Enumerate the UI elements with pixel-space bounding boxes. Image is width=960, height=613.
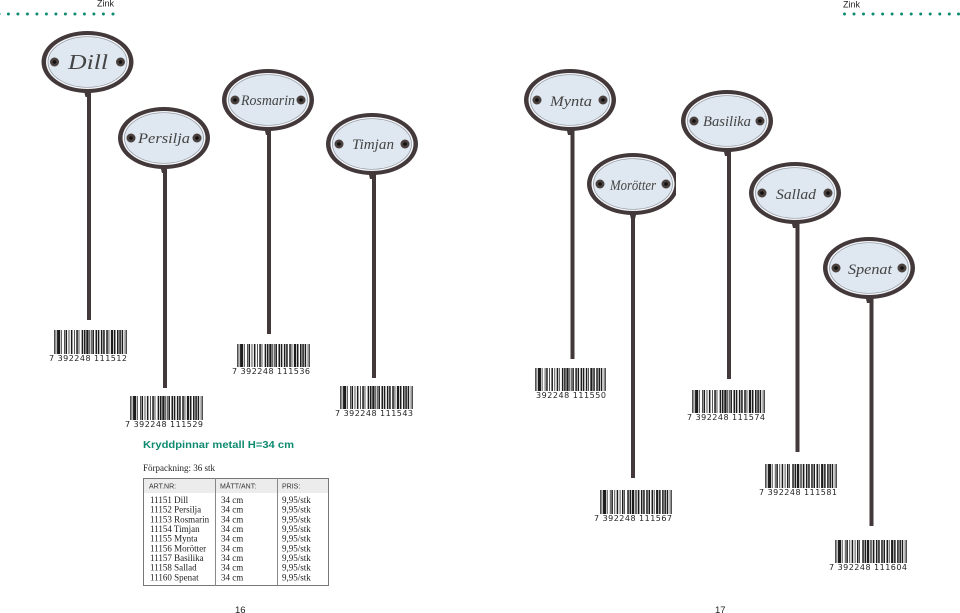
barcode 111536 (232, 344, 310, 376)
table column: article: 11157 Basilika (150, 553, 204, 563)
table column: article (150, 495, 210, 582)
barcode 111574 (687, 390, 765, 422)
barcode 111581 (759, 464, 837, 497)
plant marker: Persilja: Persilja (137, 131, 190, 147)
table column: size: 34 cm (221, 495, 243, 505)
product title: Kryddpinnar metall H=34 cm (143, 439, 294, 451)
table column: size: 34 cm (221, 572, 243, 582)
table column: size: 34 cm (221, 514, 243, 524)
table column: price: 9,95/stk (282, 534, 311, 544)
table column: price: 9,95/stk (282, 495, 311, 505)
table column: size (221, 495, 243, 582)
barcode 111604: 7 392248 111604 (829, 563, 907, 572)
barcode 111550: 392248 111550 (536, 391, 606, 400)
table header row: MÅTT/ANT: (220, 482, 256, 490)
plant marker: Dill: Dill (67, 50, 108, 74)
plant marker: Rosmarin: Rosmarin (240, 93, 295, 109)
dotted rule right (843, 12, 960, 16)
plant marker: Sallad: Sallad (776, 187, 817, 203)
table column: article: 11153 Rosmarin (150, 514, 210, 524)
barcode 111550 (535, 368, 606, 400)
barcode 111604 (829, 540, 907, 572)
table column: price: 9,95/stk (282, 572, 311, 582)
table column: size: 34 cm (221, 534, 243, 544)
table column: size: 34 cm (221, 563, 243, 573)
plant marker: Basilika (681, 90, 773, 379)
table column: article: 11160 Spenat (150, 572, 199, 582)
packaging note: Förpackning: 36 stk (143, 463, 215, 473)
table column: article: 11158 Sallad (150, 563, 197, 573)
table column: article: 11156 Morötter (150, 543, 206, 553)
plant marker: Morötter: Morötter (609, 178, 656, 194)
right page header (843, 0, 960, 16)
table column: size: 34 cm (221, 553, 243, 563)
plant marker: Rosmarin (222, 69, 314, 334)
dotted rule left (0, 12, 114, 16)
table column: price: 9,95/stk (282, 514, 311, 524)
table column: price: 9,95/stk (282, 553, 311, 563)
table column: size: 34 cm (221, 524, 243, 534)
table header row: ART.NR: (149, 484, 176, 490)
barcode 111536: 7 392248 111536 (232, 367, 310, 376)
barcode 111567 (594, 490, 672, 523)
table column: article: 11152 Persilja (150, 505, 201, 515)
plant marker: Morötter (587, 153, 679, 478)
table column: price: 9,95/stk (282, 524, 311, 534)
plant marker: Spenat: Spenat (848, 262, 893, 278)
plant marker: Persilja (118, 107, 210, 388)
barcode 111529: 7 392248 111529 (125, 420, 203, 429)
table column: article: 11155 Mynta (150, 534, 198, 544)
barcode 111512: 7 392248 111512 (49, 354, 127, 363)
table column: article: 11151 Dill (150, 495, 189, 505)
barcode 111567: 7 392248 111567 (594, 514, 672, 523)
barcode 111529 (125, 396, 203, 429)
plant marker: Basilika: Basilika (703, 114, 751, 130)
table column: price (282, 495, 311, 582)
barcode 111543 (335, 386, 413, 418)
table column: article: 11154 Timjan (150, 524, 200, 534)
plant marker: Mynta: Mynta (549, 94, 592, 110)
table column: price: 9,95/stk (282, 505, 311, 515)
plant marker: Spenat (823, 237, 915, 526)
plant marker: Mynta (524, 69, 616, 359)
barcode 111543: 7 392248 111543 (335, 409, 413, 418)
left page header (0, 0, 115, 16)
price table (144, 478, 328, 586)
plant marker: Timjan (326, 113, 418, 378)
table header row (149, 482, 300, 490)
table column: price: 9,95/stk (282, 543, 311, 553)
table header row: PRIS: (282, 484, 300, 490)
plant marker: Sallad (749, 162, 841, 452)
barcode 111574: 7 392248 111574 (687, 413, 765, 422)
table column: size: 34 cm (221, 543, 243, 553)
table column: price: 9,95/stk (282, 563, 311, 573)
plant marker: Dill (42, 31, 134, 320)
barcode 111512 (49, 330, 127, 363)
barcode 111581: 7 392248 111581 (759, 488, 837, 497)
plant marker: Timjan: Timjan (352, 137, 394, 153)
table column: size: 34 cm (221, 505, 243, 515)
